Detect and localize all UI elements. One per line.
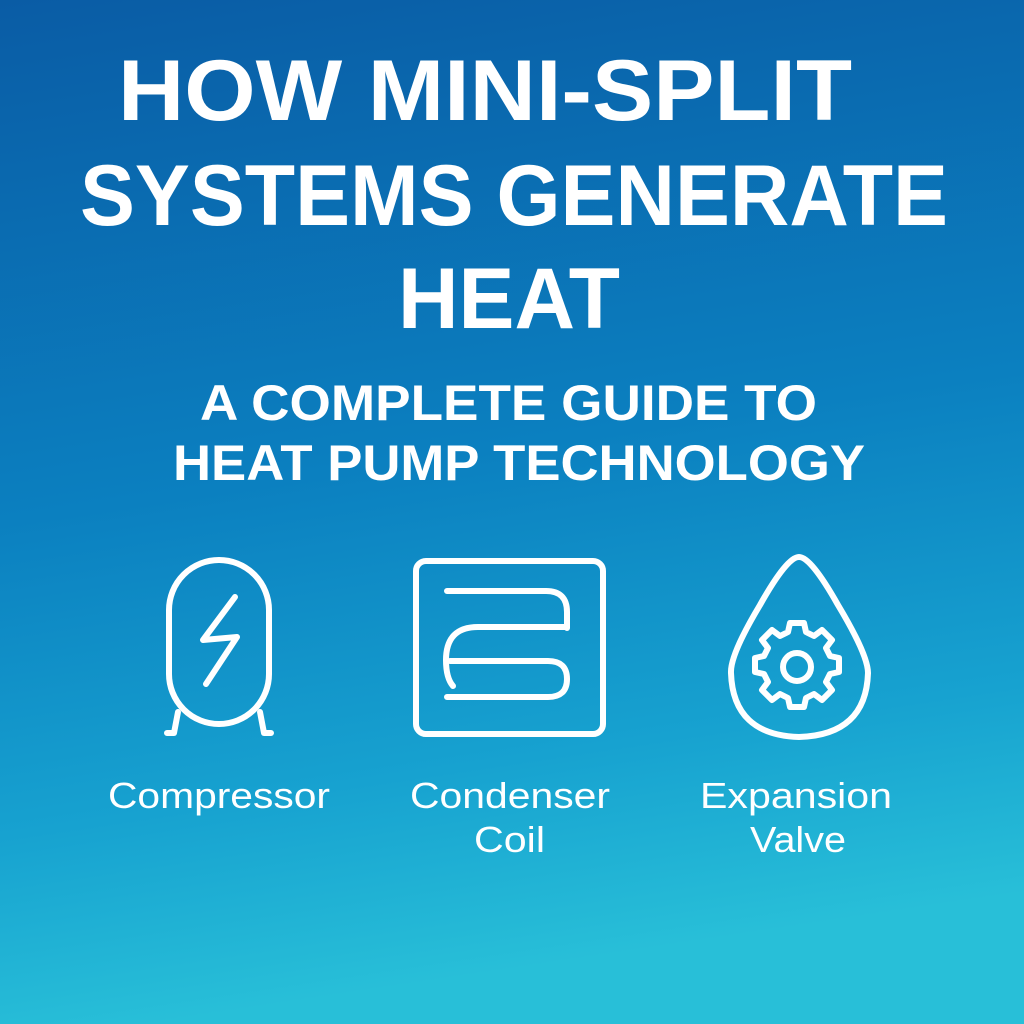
subtitle: HEAT PUMP TECHNOLOGY bbox=[173, 435, 865, 491]
labels bbox=[108, 775, 892, 860]
labels: Coil bbox=[474, 819, 545, 860]
icon: compressor bbox=[167, 560, 271, 733]
labels: Condenser bbox=[410, 775, 610, 816]
labels: Valve bbox=[750, 819, 846, 860]
subtitle: A COMPLETE GUIDE TO bbox=[200, 375, 817, 431]
icon: condenser coil bbox=[416, 561, 603, 734]
subtitle bbox=[173, 375, 865, 491]
title: SYSTEMS GENERATE bbox=[80, 148, 948, 244]
title: HEAT bbox=[398, 251, 620, 347]
icon: expansion valve bbox=[731, 557, 868, 737]
title: HOW MINI-SPLIT bbox=[118, 43, 852, 139]
labels: Expansion bbox=[700, 775, 892, 816]
title bbox=[80, 43, 948, 347]
labels: Compressor bbox=[108, 775, 330, 816]
